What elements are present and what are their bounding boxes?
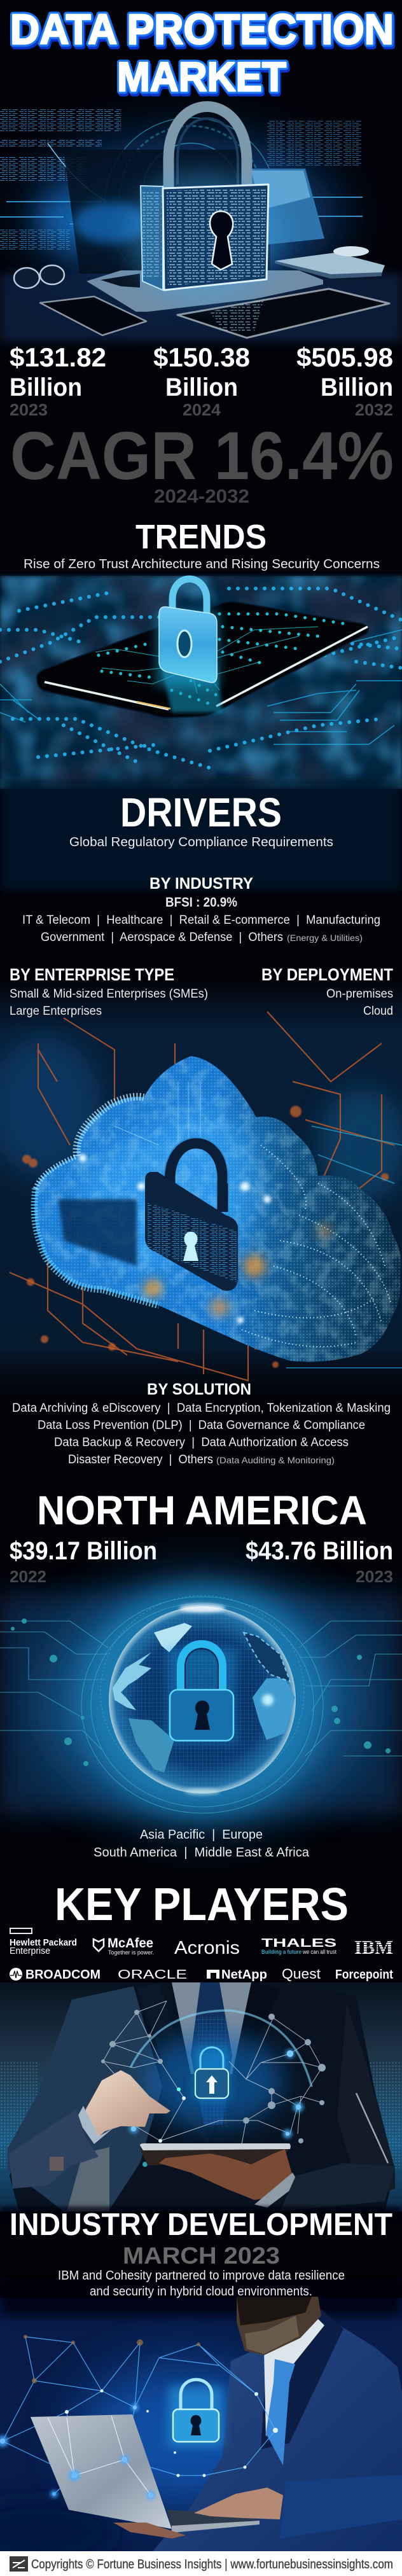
north america 2022 value: $39.17 Billion [10, 1537, 157, 1565]
north america heading [10, 1487, 393, 1586]
tablet right [177, 289, 389, 338]
panel: businessman with tablet and padlock [0, 1982, 402, 2225]
panel: hero image with padlock and devices [0, 107, 402, 342]
network lines [3, 2337, 275, 2495]
north america 2023 value: 2023 [356, 1567, 393, 1586]
supporting hand [159, 2149, 293, 2200]
logo: McAfee: Together is power. [108, 1949, 154, 1956]
by solution segment: Data Archiving & eDiscovery | Data Encryption, Tokenization & Masking [12, 1402, 391, 1415]
stat 2023: Billion [10, 373, 82, 401]
regions list: South America | Middle East & Africa [94, 1846, 310, 1860]
by industry segment: Government | Aerospace & Defense | Others [41, 931, 283, 944]
by enterprise type segment: Small & Mid-sized Enterprises (SMEs) [10, 987, 208, 1001]
tablet left [40, 296, 146, 335]
laptop [31, 2414, 172, 2529]
tablet padlock [194, 2047, 230, 2100]
stat 2024 [153, 342, 250, 419]
footer bar [0, 2551, 402, 2576]
continents [113, 1623, 295, 1772]
key players heading: KEY PLAYERS [55, 1879, 349, 1930]
title: MARKET [117, 53, 286, 100]
industry development heading [10, 2208, 392, 2299]
earbuds [14, 265, 64, 288]
suit [153, 2309, 402, 2551]
head [237, 2297, 321, 2355]
panel: businessman with laptop and padlock [0, 2278, 402, 2564]
padlock [169, 2379, 223, 2446]
panel: globe with padlock [0, 1581, 402, 1823]
logo: Thales [261, 1937, 336, 1955]
title: DATA PROTECTION [10, 6, 394, 53]
by solution segment: Disaster Recovery | Others [68, 1453, 213, 1466]
by solution segment: Data Backup & Recovery | Data Authorization & Access [54, 1436, 349, 1449]
by deployment segment: Cloud [363, 1005, 393, 1018]
logo: Hewlett Packard Enterprise: Enterprise [10, 1946, 50, 1956]
regions list: Asia Pacific | Europe [140, 1828, 263, 1842]
suit jacket [8, 1982, 395, 2211]
globe sphere [109, 1606, 296, 1793]
orange glows [144, 1223, 332, 1316]
industry development heading: and security in hybrid cloud environments. [90, 2285, 312, 2299]
by solution segment [12, 1381, 391, 1466]
white sparkle glows [79, 1154, 271, 1323]
second screen [248, 169, 324, 245]
north america 2022 value: 2022 [10, 1567, 46, 1586]
suit sleeve left [9, 2109, 99, 2189]
laptop base [87, 270, 323, 312]
laptop screen [64, 150, 270, 274]
shirt and tie [172, 1982, 251, 2074]
stat 2023: 2023 [10, 400, 48, 419]
stat 2024: 2024 [183, 400, 221, 419]
by industry segment: BFSI : 20.9% [165, 895, 237, 910]
dial rings [105, 118, 277, 289]
industry development heading: MARCH 2023 [123, 2243, 280, 2269]
logo: Thales: Building a future [261, 1949, 302, 1955]
stat 2024: Billion [165, 373, 238, 401]
by deployment segment [261, 965, 393, 1018]
north america 2023 value [246, 1537, 393, 1586]
industry development heading: IBM and Cohesity partnered to improve data resilience [58, 2269, 345, 2283]
drivers heading: Global Regulatory Compliance Requirements [69, 835, 333, 849]
by industry segment [22, 875, 380, 944]
padlock [127, 107, 280, 299]
stat 2023: $131.82 [10, 342, 106, 372]
icon: Fortune Business Insights logo [10, 2556, 28, 2572]
held tablet [140, 2145, 291, 2165]
logo: Hewlett Packard Enterprise [10, 1928, 77, 1956]
phone chip traces [95, 627, 318, 693]
logo: Quest: Quest [282, 1966, 321, 1982]
by industry segment: BY INDUSTRY [149, 875, 253, 893]
drivers heading: DRIVERS [120, 790, 282, 835]
north america 2022 value [10, 1537, 157, 1586]
key players heading [0, 1879, 402, 1982]
stat 2032: $505.98 [296, 342, 393, 372]
title: DATA PROTECTION [10, 6, 394, 53]
phone padlock [156, 579, 219, 687]
stat 2032: Billion [321, 373, 393, 401]
phone [37, 602, 368, 718]
trends heading: TRENDS [135, 518, 267, 556]
network sphere [103, 2001, 322, 2144]
industry development heading: INDUSTRY DEVELOPMENT [10, 2208, 392, 2242]
orange circuit lines [10, 1012, 394, 1381]
network nodes [0, 2390, 278, 2498]
by solution segment: BY SOLUTION [147, 1381, 251, 1398]
panel: smartphone with padlock on circuit board [0, 576, 402, 891]
logo: McAfee [94, 1936, 154, 1956]
stat 2032: 2032 [355, 400, 393, 419]
side circuits [0, 1596, 402, 1813]
drivers heading [69, 790, 333, 849]
trends heading [24, 518, 380, 571]
cyan circuit lines [286, 1126, 402, 1368]
by enterprise type segment [10, 965, 208, 1018]
title: DATA PROTECTION [11, 8, 395, 56]
trends heading: Rise of Zero Trust Architecture and Rising Security Concerns [24, 557, 380, 571]
stat 2032 [296, 342, 393, 419]
stat 2023 [10, 342, 106, 419]
market size stats [10, 342, 393, 419]
by deployment segment: On-premises [326, 987, 393, 1001]
mouse pad and mouse [275, 253, 385, 275]
keyhole [210, 211, 233, 270]
cloud [34, 1056, 401, 1362]
reflection [160, 662, 223, 713]
north america heading: NORTH AMERICA [37, 1487, 367, 1533]
logo: Thales: we can all trust [302, 1949, 336, 1955]
circuit traces [0, 630, 402, 744]
regions list [94, 1828, 310, 1860]
CAGR figure: 2024-2032 [154, 486, 249, 507]
data light streaks [114, 1082, 200, 1145]
by solution segment: Data Loss Prevention (DLP) | Data Governance & Compliance [38, 1419, 365, 1432]
logo: Acronis: Acronis [174, 1938, 240, 1958]
by industry segment: (Energy & Utilities) [287, 933, 363, 943]
hands [194, 2488, 283, 2519]
globe padlock [167, 1644, 237, 1743]
panel: cloud with padlock and orange circuits [0, 980, 402, 1412]
logo: McAfee: McAfee [107, 1936, 153, 1951]
logo: NetApp: NetApp [221, 1968, 267, 1982]
stat 2024: $150.38 [153, 342, 250, 372]
company logos [10, 1928, 394, 1982]
title: MARKET [117, 53, 286, 100]
hand pointing [83, 2070, 170, 2140]
cloud padlock [145, 1138, 238, 1291]
logo: Thales: THALES [261, 1937, 336, 1949]
logo: IBM: IBM [354, 1936, 393, 1958]
by solution segment: (Data Auditing & Monitoring) [216, 1455, 335, 1465]
by industry segment: IT & Telecom | Healthcare | Retail & E-commerce | Manufacturing [22, 914, 380, 927]
by enterprise type segment: BY ENTERPRISE TYPE [10, 965, 174, 984]
logo: Hewlett Packard Enterprise: Hewlett Packard [10, 1937, 77, 1948]
logo: Forcepoint: Forcepoint [335, 1968, 393, 1982]
logo: Oracle: ORACLE [118, 1968, 187, 1982]
logo: Broadcom: BROADCOM [25, 1968, 100, 1982]
title [10, 6, 395, 102]
by enterprise type segment: Large Enterprises [10, 1005, 102, 1018]
title: MARKET [118, 56, 288, 102]
